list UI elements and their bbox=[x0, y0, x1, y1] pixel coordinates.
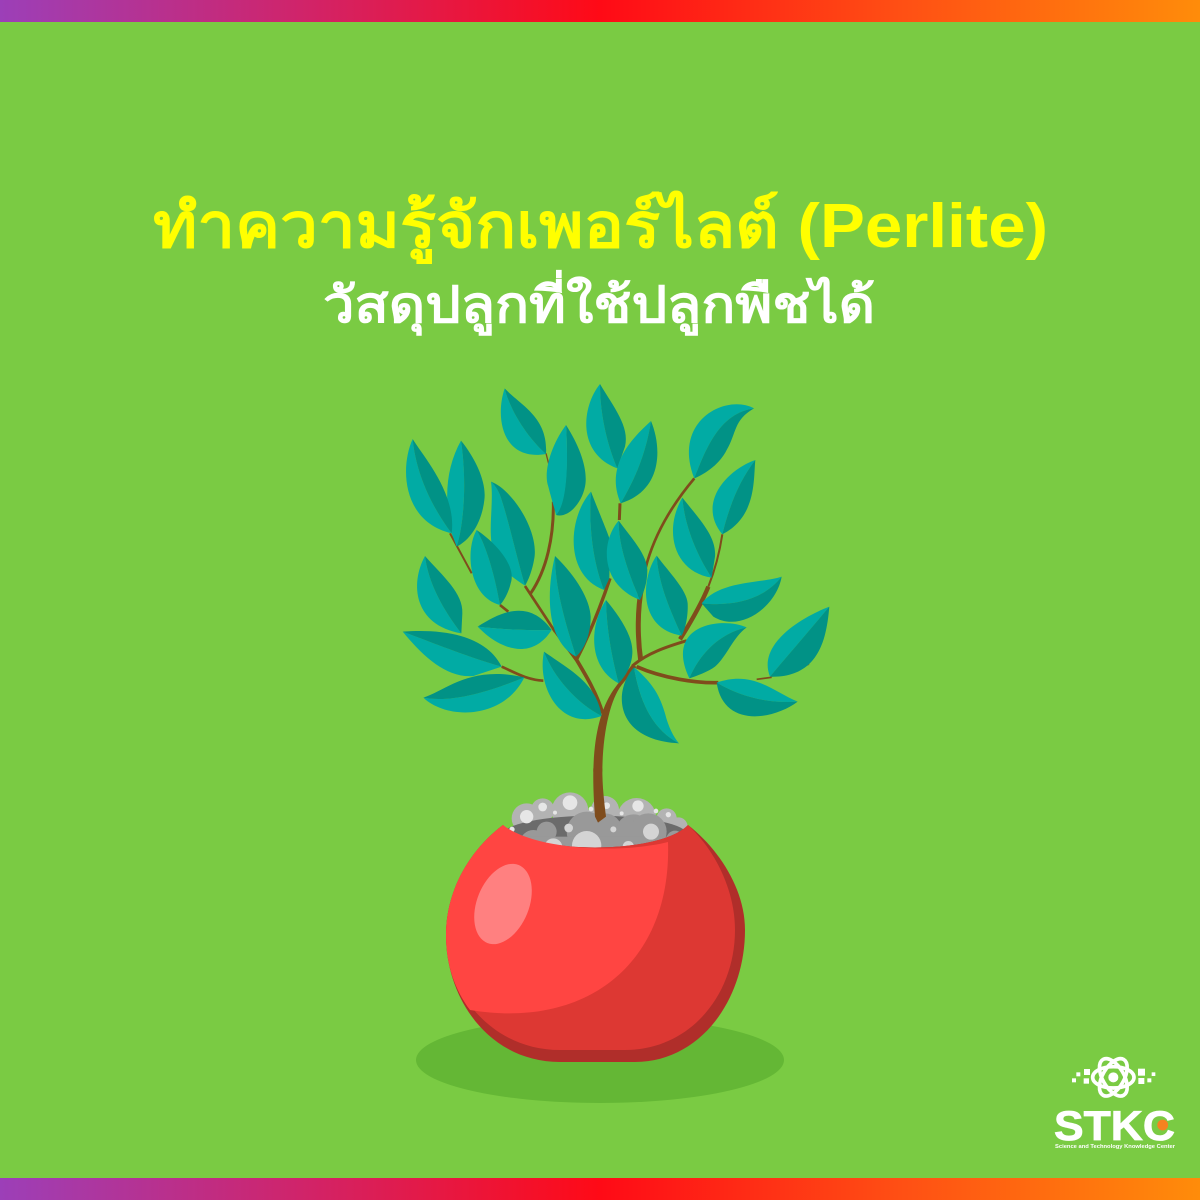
red pot bbox=[446, 825, 745, 1062]
leaf bbox=[702, 577, 782, 622]
leaf bbox=[417, 556, 462, 633]
front pebble spots bbox=[544, 824, 659, 860]
leaf bbox=[768, 607, 829, 677]
leaf bbox=[501, 388, 546, 455]
stem in front of pebbles bbox=[593, 768, 606, 823]
leaf bbox=[547, 425, 586, 515]
logo orange dot bbox=[1157, 1120, 1168, 1130]
logo atom icon bbox=[1093, 1054, 1134, 1101]
leaf bbox=[574, 492, 610, 590]
STKC logo bbox=[1054, 1054, 1176, 1150]
leaf bbox=[543, 652, 602, 719]
leaf bbox=[491, 482, 535, 586]
dark soil opening bbox=[502, 816, 688, 854]
title: ทำความรู้จักเพอร์ไลต์ (Perlite) bbox=[153, 190, 1048, 264]
perlite pebbles bbox=[502, 792, 688, 860]
pot mid shade bbox=[446, 825, 735, 1050]
leaf bbox=[470, 530, 512, 605]
leaf bbox=[406, 439, 452, 533]
leaf bbox=[713, 460, 755, 534]
back pebble spots bbox=[509, 795, 671, 832]
leaf bbox=[622, 667, 679, 743]
leaf bbox=[403, 631, 502, 676]
pot dark side bbox=[446, 825, 745, 1062]
leaf bbox=[586, 384, 626, 468]
leaf bbox=[550, 556, 591, 657]
pot bright face bbox=[446, 825, 668, 1013]
leaf bbox=[673, 498, 715, 578]
leaf bbox=[616, 421, 657, 503]
logo caption: Science and Technology Knowledge Center bbox=[1055, 1144, 1176, 1150]
leaf bbox=[689, 404, 754, 478]
subtitle: วัสดุปลูกที่ใช้ปลูกพืชได้ bbox=[323, 270, 875, 336]
front pebbles bbox=[520, 812, 684, 857]
pot highlight bbox=[463, 855, 543, 953]
top gradient bar bbox=[0, 0, 1200, 22]
leaf bbox=[646, 556, 688, 636]
leaf bbox=[717, 679, 798, 716]
leaf bbox=[683, 623, 747, 678]
leaf bbox=[447, 441, 485, 547]
logo pixel squares bbox=[1072, 1069, 1155, 1084]
back pebbles bbox=[512, 792, 688, 837]
leaf bbox=[594, 600, 632, 683]
leaf bbox=[478, 611, 552, 649]
leaf bbox=[607, 521, 647, 600]
ground shadow bbox=[416, 1017, 784, 1103]
bottom gradient bar bbox=[0, 1178, 1200, 1200]
branches and trunk bbox=[450, 453, 809, 772]
leaf bbox=[423, 674, 524, 712]
logo wordmark: STKC bbox=[1054, 1102, 1175, 1149]
plant bbox=[403, 384, 829, 772]
